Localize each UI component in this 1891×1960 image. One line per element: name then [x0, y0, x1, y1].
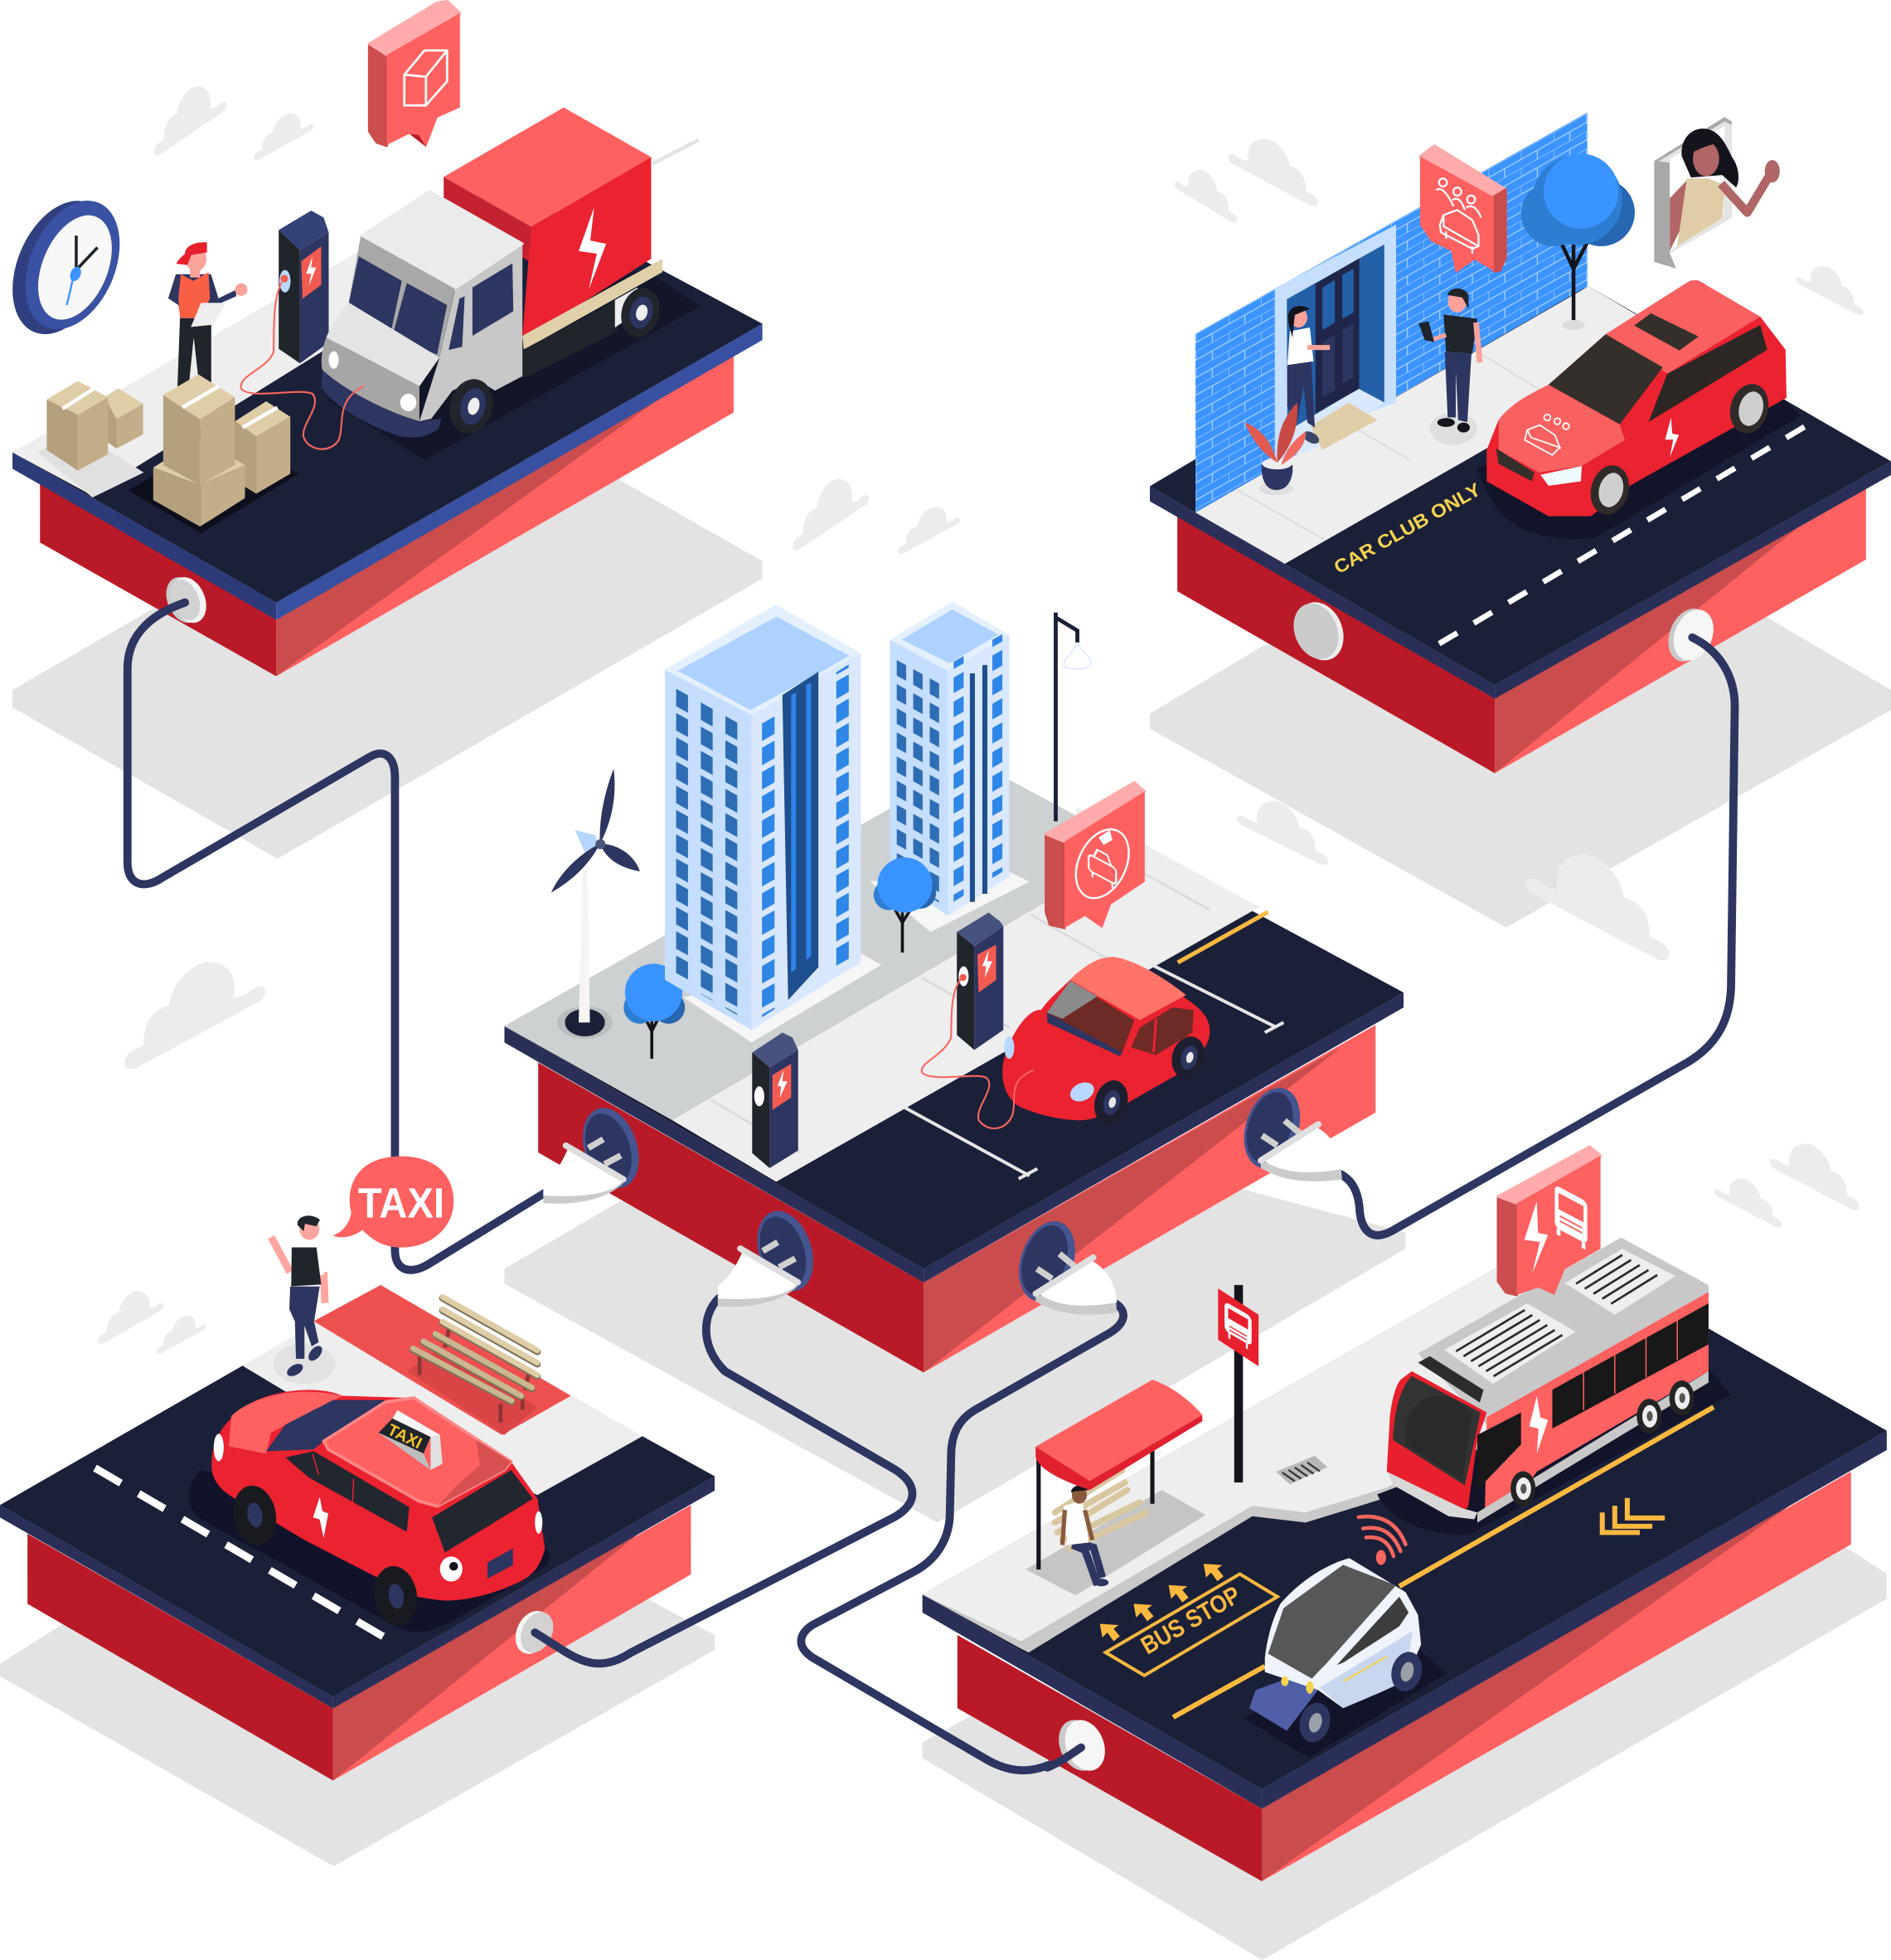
cable end: bus socket — [1047, 1748, 1081, 1768]
taxi roof sign — [378, 1410, 443, 1470]
right box — [235, 401, 290, 494]
socket: taxi — [509, 1605, 560, 1660]
plug: hub lower left — [718, 1204, 823, 1307]
box on pavement — [46, 381, 108, 470]
bus stop sign — [1218, 1285, 1258, 1482]
panel: bus platform — [923, 1238, 1887, 1881]
cab — [321, 192, 522, 438]
roof vent — [1444, 1303, 1575, 1384]
wheel — [1387, 1648, 1427, 1695]
tree: middle — [874, 857, 936, 953]
panel: delivery platform — [12, 140, 763, 677]
plug: hub left — [543, 1101, 648, 1204]
brick wall — [1195, 113, 1588, 512]
background clouds — [98, 86, 1864, 1354]
truck shadow — [327, 269, 700, 460]
bench — [1055, 1470, 1146, 1549]
cardboard boxes — [46, 375, 290, 526]
wifi signal — [1359, 1516, 1405, 1565]
road dashes — [1439, 426, 1806, 643]
wheel — [1670, 1380, 1695, 1415]
door mat — [1311, 402, 1377, 450]
socket: delivery — [160, 572, 213, 628]
pavement — [923, 1238, 1709, 1652]
wheel — [1636, 1399, 1662, 1434]
lower box — [153, 439, 245, 526]
road label: CAR CLUB ONLY — [1331, 479, 1484, 578]
panel: taxi platform — [0, 1285, 715, 1781]
panel: car club platform — [1150, 286, 1891, 773]
wheel — [1585, 461, 1634, 519]
car club car — [1477, 280, 1801, 539]
taxi — [189, 1390, 549, 1633]
tower base small — [870, 871, 1030, 932]
tower base — [684, 953, 881, 1042]
bubble: TAXI speech: TAXI — [358, 1179, 444, 1226]
callout: electric bus icon — [1498, 1147, 1601, 1295]
red waiting area — [313, 1285, 571, 1435]
woman waving — [1670, 129, 1780, 251]
door frame — [1275, 225, 1396, 465]
wheel — [1089, 1076, 1132, 1128]
bench: taxi stand — [413, 1297, 537, 1423]
tree: car club — [1521, 153, 1635, 330]
callout: car club icon — [1420, 146, 1506, 273]
delivery worker — [168, 242, 248, 386]
wheel — [370, 1563, 422, 1629]
charging station: front — [752, 1032, 798, 1168]
tree: left — [623, 963, 685, 1059]
truck — [321, 108, 700, 460]
potted plant — [1245, 402, 1306, 495]
plug: hub lower right — [1009, 1214, 1117, 1315]
ground shadows — [0, 407, 1891, 1960]
socket: car club left — [1286, 595, 1352, 667]
small box — [104, 388, 143, 449]
charging cable: truck — [241, 279, 364, 449]
socket: bus — [1051, 1714, 1113, 1777]
wheel — [1724, 380, 1774, 438]
chevrons — [1603, 1498, 1665, 1532]
taxi passenger — [271, 1215, 336, 1384]
wheel — [1167, 1033, 1210, 1082]
charging cable: car — [922, 978, 1034, 1128]
woman at the door — [1287, 306, 1330, 446]
tower small — [890, 601, 1009, 916]
panel: central charging hub — [504, 761, 1404, 1372]
door — [1316, 259, 1360, 414]
electric car: hub — [1002, 957, 1210, 1128]
clock — [0, 186, 138, 349]
bubble: TAXI speech — [333, 1157, 453, 1248]
seated passenger — [1062, 1485, 1108, 1586]
bus stop marking: BUS STOP — [1137, 1581, 1245, 1660]
taxi roof sign: TAXI — [385, 1421, 424, 1453]
bus — [1377, 1238, 1730, 1535]
wheel — [1510, 1472, 1535, 1506]
road dashes — [95, 1468, 385, 1637]
street lamp — [1055, 613, 1091, 822]
bus shelter — [1035, 1380, 1202, 1586]
callout: EV charging icon — [1046, 783, 1145, 928]
wheel — [229, 1482, 281, 1549]
rear wheel — [616, 284, 665, 342]
plug: hub right — [1234, 1080, 1342, 1181]
yellow lane line — [1173, 1407, 1714, 1717]
wind turbine — [551, 769, 640, 1039]
drain grate — [1276, 1456, 1327, 1484]
autonomous pod — [1243, 1558, 1446, 1759]
man with tablet — [1418, 289, 1480, 445]
cables — [128, 603, 1735, 1770]
callout: package icon — [369, 2, 460, 147]
socket: car club right — [1661, 603, 1721, 667]
bus stop marking — [1100, 1564, 1278, 1676]
charging station: depot — [279, 211, 328, 363]
wheel — [1295, 1700, 1335, 1746]
cargo box — [444, 108, 662, 379]
tall box — [163, 375, 235, 485]
parking lines — [904, 965, 1283, 1179]
hood icon — [1525, 415, 1569, 455]
video call window — [1654, 117, 1780, 269]
charging station: rear — [957, 913, 1003, 1050]
front wheel — [444, 374, 499, 439]
tower large — [665, 604, 861, 1030]
roof vent — [1565, 1249, 1675, 1315]
